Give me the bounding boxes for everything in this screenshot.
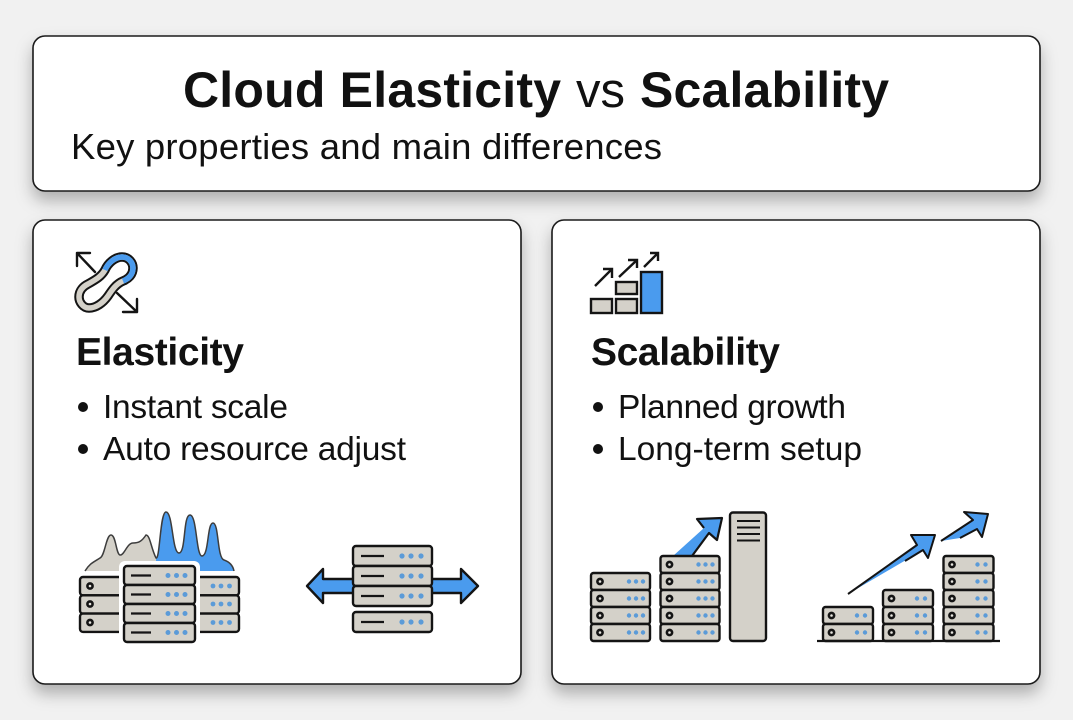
- bullet list: scalability: Long-term setup: [618, 431, 862, 468]
- illustration: horizontal expansion: [307, 546, 478, 632]
- server stack: step two: [883, 590, 933, 641]
- bullet list: elasticity: Instant scale: [103, 389, 288, 426]
- arrow: right: [431, 569, 478, 603]
- title: Scalability: [640, 62, 889, 118]
- server rack: right: [189, 577, 239, 632]
- header card background: [33, 36, 1040, 191]
- heading: Elasticity: Elasticity: [76, 331, 244, 374]
- panel: elasticity: [33, 220, 521, 684]
- icon: growing bars with arrows: [591, 253, 662, 313]
- arrow: growth one: [848, 535, 935, 594]
- elasticity card background: [33, 220, 521, 684]
- subtitle: Key properties and main differences: [71, 126, 662, 167]
- area chart: demand: [85, 512, 234, 571]
- bullet list: scalability: Planned growth: [618, 389, 846, 426]
- bullet list: elasticity: Auto resource adjust: [103, 431, 407, 468]
- illustration: servers under demand spikes: [80, 512, 239, 647]
- bullet list: scalability: [593, 389, 862, 468]
- arrow: growth two: [941, 512, 988, 541]
- title: Cloud Elasticity: [183, 62, 561, 118]
- illustration: vertical scale-up: [591, 512, 766, 641]
- server rack: centre: [119, 561, 200, 647]
- scalability card background: [552, 220, 1040, 684]
- bullet list: elasticity: [78, 389, 407, 468]
- baseline: [817, 640, 1000, 642]
- server stack: step three: [944, 556, 994, 641]
- arrow: scale up: [673, 518, 722, 556]
- server stack: small: [591, 573, 650, 641]
- icon: stretching loop with arrows: [77, 253, 137, 312]
- server rack: left: [80, 577, 130, 632]
- illustration: stepwise growth: [817, 512, 1000, 641]
- heading: Scalability: Scalability: [591, 331, 780, 374]
- tower server: [730, 512, 766, 641]
- title: vs: [576, 64, 625, 118]
- arrow: left: [307, 569, 354, 603]
- title: [183, 62, 889, 118]
- server stack: step one: [823, 607, 873, 641]
- server stack: [353, 546, 432, 632]
- server stack: medium: [660, 556, 720, 641]
- panel: scalability: [552, 220, 1040, 684]
- header panel: [33, 36, 1040, 191]
